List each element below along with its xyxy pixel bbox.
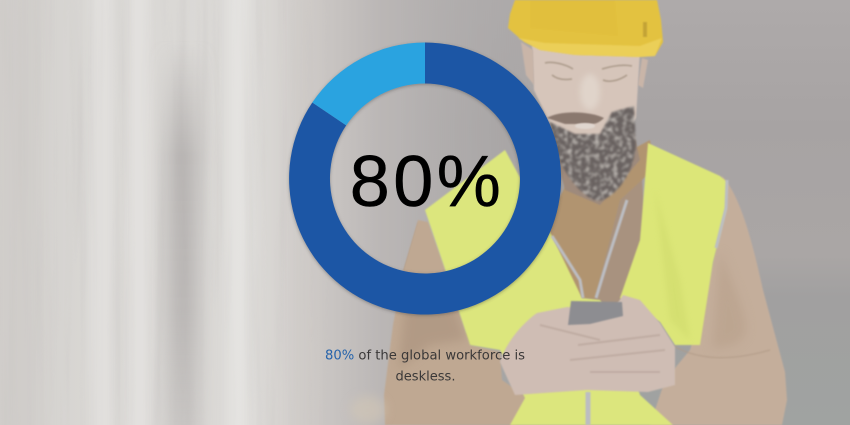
caption — [325, 348, 525, 384]
face — [532, 45, 640, 145]
ears — [521, 42, 648, 88]
donut chart: 80% — [289, 42, 561, 314]
vest fold shading — [655, 190, 690, 340]
caption line 1: 80% of the global workforce is — [325, 348, 525, 364]
beard — [550, 106, 636, 201]
cuff shadow — [672, 345, 770, 358]
hands — [500, 295, 675, 395]
left sleeve shading — [398, 280, 466, 370]
concrete wall streaks — [0, 0, 306, 425]
finger lines — [540, 325, 665, 372]
worker photo — [350, 0, 787, 425]
neck — [555, 125, 640, 205]
hard hat — [508, 0, 663, 57]
left sleeve — [384, 220, 528, 425]
warm tone at bottom of frame — [350, 396, 386, 424]
dark blue segment — [289, 42, 561, 314]
torso shirt — [395, 150, 650, 345]
reflective strips — [552, 180, 727, 425]
right sleeve — [650, 176, 787, 425]
mouth — [575, 123, 595, 129]
mustache — [547, 112, 604, 124]
caption line 2: deskless. — [396, 370, 456, 384]
sleeve fold — [712, 250, 746, 350]
nose highlight — [580, 74, 600, 110]
safety vest left — [425, 150, 673, 425]
smartphone — [568, 301, 623, 325]
safety vest right — [620, 143, 727, 345]
shirt collar and placket — [540, 140, 655, 298]
eyes and brows — [545, 62, 632, 81]
light blue segment — [312, 42, 425, 125]
donut value: 80% — [350, 142, 504, 222]
